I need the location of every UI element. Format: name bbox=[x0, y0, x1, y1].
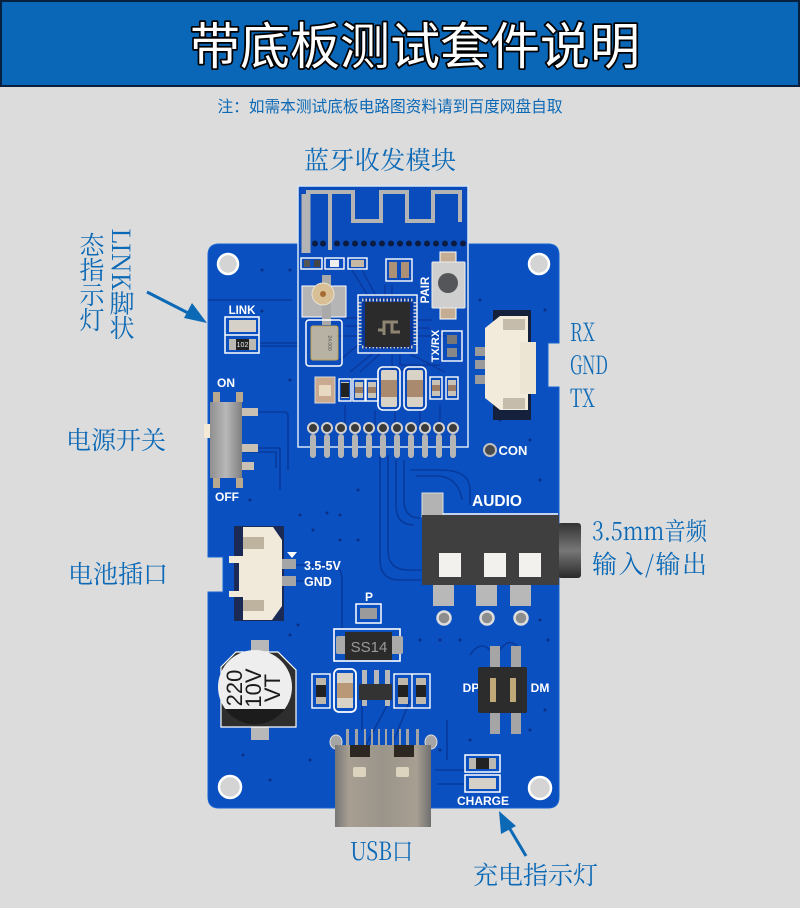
top component bodies bbox=[304, 260, 364, 267]
electrolytic capacitor: VT bbox=[260, 674, 285, 702]
module via row bbox=[312, 240, 466, 246]
crystal: 24.000 bbox=[326, 335, 332, 351]
electrolytic capacitor: 10V bbox=[241, 668, 266, 708]
p smd bbox=[356, 604, 381, 623]
link led and resistor: 102 bbox=[237, 342, 248, 349]
board vias bbox=[224, 268, 550, 782]
label: battery connector: 电池插口 bbox=[68, 555, 168, 591]
battery silk labels: GND bbox=[304, 575, 332, 589]
audio silk label: AUDIO bbox=[472, 493, 522, 510]
label: power switch: 电源开关 bbox=[66, 421, 166, 457]
electrolytic capacitor bbox=[218, 640, 296, 740]
usb-c connector bbox=[330, 729, 437, 827]
tx/rx label: TX/RX bbox=[430, 329, 442, 362]
top right jst connector bbox=[475, 310, 536, 420]
label: audio io: 输入/输出 bbox=[592, 545, 707, 581]
dm silk label: DM bbox=[531, 681, 549, 695]
status led bbox=[315, 377, 335, 403]
main chip bbox=[358, 295, 417, 353]
electrolytic capacitor: 220 bbox=[222, 670, 247, 706]
battery silk labels bbox=[304, 559, 341, 589]
label: rx gnd tx: TX bbox=[570, 379, 595, 415]
lower components bbox=[339, 367, 458, 410]
tx/rx leds bbox=[442, 331, 462, 361]
audio jack bbox=[422, 493, 581, 624]
label: link pin status led bbox=[74, 228, 140, 340]
dp silk label: DP bbox=[463, 681, 479, 695]
antenna bbox=[306, 192, 460, 253]
chip logo bbox=[378, 322, 400, 335]
title banner bbox=[1, 1, 799, 86]
title: 带底板测试套件说明 bbox=[190, 7, 640, 79]
circuit board bbox=[204, 186, 581, 827]
board outline bbox=[208, 244, 559, 808]
label: audio io bbox=[592, 512, 708, 581]
module pcb bbox=[298, 186, 468, 447]
label: bluetooth module: 蓝牙收发模块 bbox=[304, 141, 456, 177]
label: rx gnd tx bbox=[570, 313, 608, 415]
jumper header bbox=[478, 646, 527, 734]
off silk label: OFF bbox=[215, 490, 239, 504]
power switch bbox=[204, 392, 258, 488]
arrow: to charge led bbox=[499, 811, 526, 856]
link led and resistor bbox=[225, 317, 259, 353]
label: rx gnd tx: GND bbox=[570, 346, 608, 382]
con testpoint: CON bbox=[499, 443, 527, 458]
label: usb port: USB口 bbox=[350, 832, 413, 868]
link silk label: LINK bbox=[229, 305, 256, 317]
ss14 diode bbox=[334, 629, 403, 661]
note text: 注：如需本测试底板电路图资料请到百度网盘自取 bbox=[217, 97, 563, 116]
pair label: PAIR bbox=[420, 276, 432, 303]
charge silk label: CHARGE bbox=[457, 794, 509, 808]
con testpoint bbox=[484, 443, 527, 458]
label: audio io: 3.5mm音频 bbox=[592, 512, 708, 548]
charge led and resistor bbox=[465, 755, 500, 792]
label: link pin status led: LINK脚状 bbox=[104, 228, 140, 340]
small capacitors bbox=[386, 259, 412, 281]
ufl antenna connector bbox=[302, 275, 346, 325]
label: charge led: 充电指示灯 bbox=[473, 856, 598, 892]
label: rx gnd tx: RX bbox=[570, 313, 595, 349]
crystal bbox=[306, 320, 342, 366]
power management parts bbox=[312, 669, 430, 712]
module traces bbox=[335, 270, 445, 428]
battery jst connector bbox=[229, 526, 297, 621]
ss14 diode: SS14 bbox=[351, 639, 387, 656]
battery silk labels: 3.5-5V bbox=[304, 559, 341, 573]
top small components bbox=[301, 258, 367, 269]
arrow: to link led bbox=[147, 292, 207, 323]
pair button bbox=[432, 252, 465, 319]
mounting holes bbox=[218, 254, 551, 799]
on silk label: ON bbox=[217, 376, 235, 390]
board traces bbox=[208, 300, 520, 784]
castellated pins bbox=[308, 423, 458, 458]
bluetooth module bbox=[298, 186, 468, 458]
p silk label: P bbox=[365, 590, 373, 604]
label: link pin status led: 态指示灯 bbox=[74, 232, 110, 332]
